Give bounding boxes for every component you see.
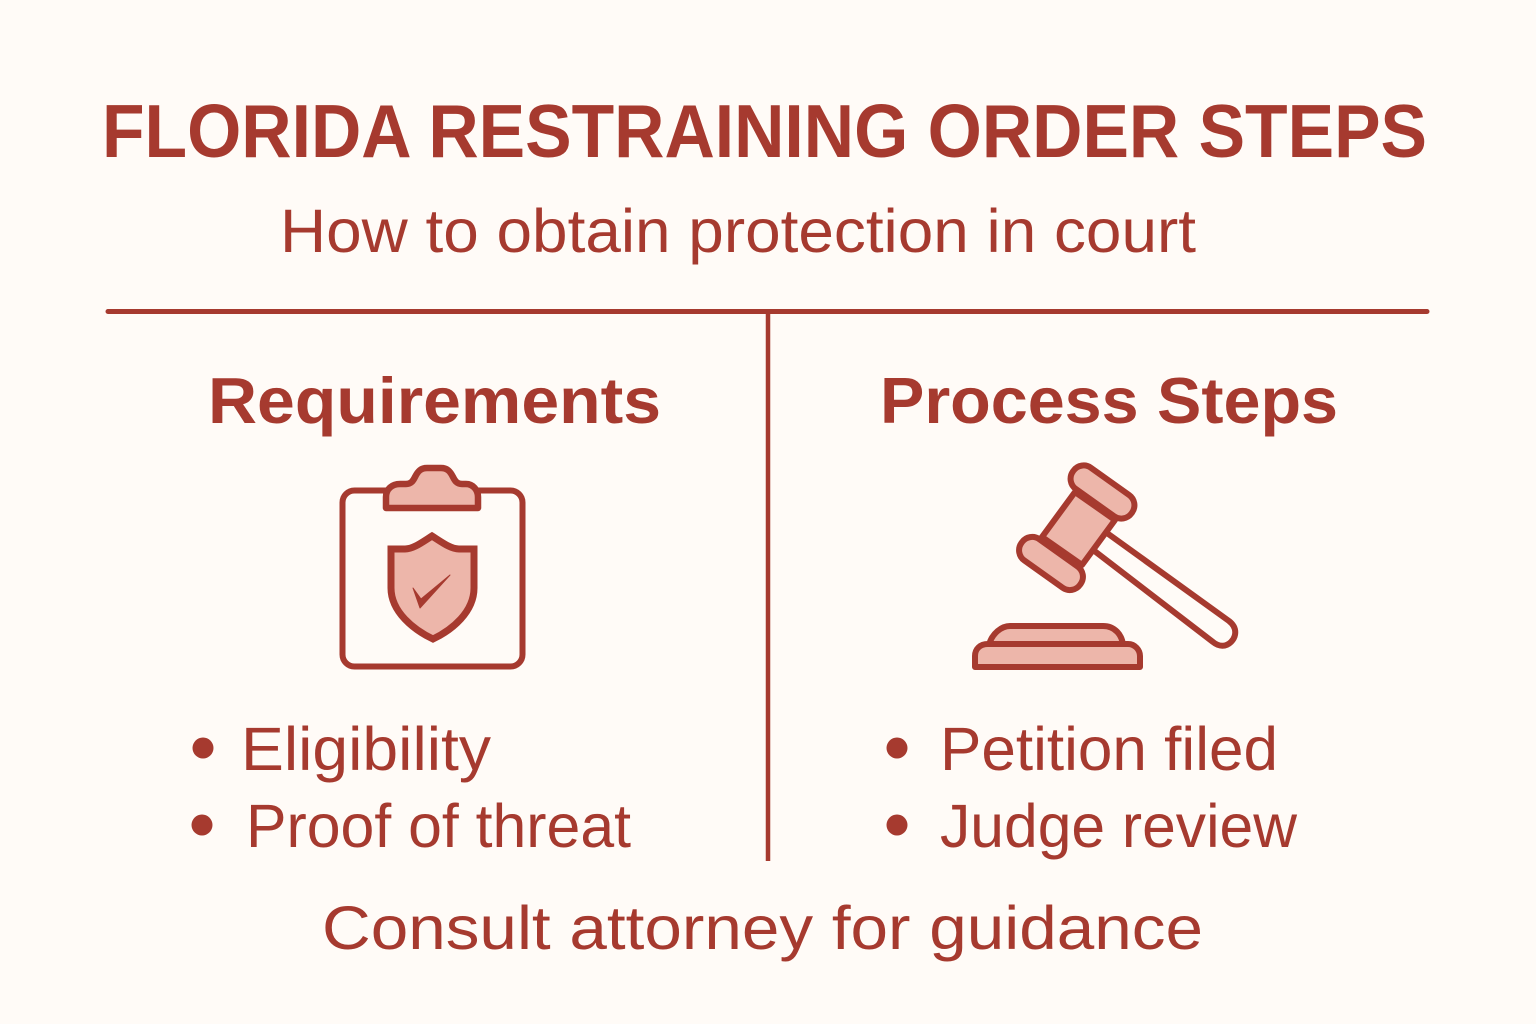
bullet list: requirements: Proof of threat (246, 792, 631, 860)
panel: process steps (880, 364, 1338, 860)
footer note: Consult attorney for guidance (322, 894, 1203, 962)
bullet list: requirements (192, 715, 631, 860)
bullet list: process steps (886, 715, 1298, 860)
bullet list: process steps: Judge review (940, 792, 1298, 860)
icon: gavel (975, 461, 1235, 667)
bullet list: requirements: Eligibility (241, 715, 492, 783)
icon: clipboard with shield (342, 468, 522, 666)
heading: requirements: Requirements (208, 364, 661, 437)
bullet list: process steps: Petition filed (940, 715, 1278, 783)
panel: requirements (192, 364, 661, 860)
heading: process steps: Process Steps (880, 364, 1338, 437)
subtitle: How to obtain protection in court (280, 197, 1196, 265)
title: FLORIDA RESTRAINING ORDER STEPS (102, 89, 1427, 173)
